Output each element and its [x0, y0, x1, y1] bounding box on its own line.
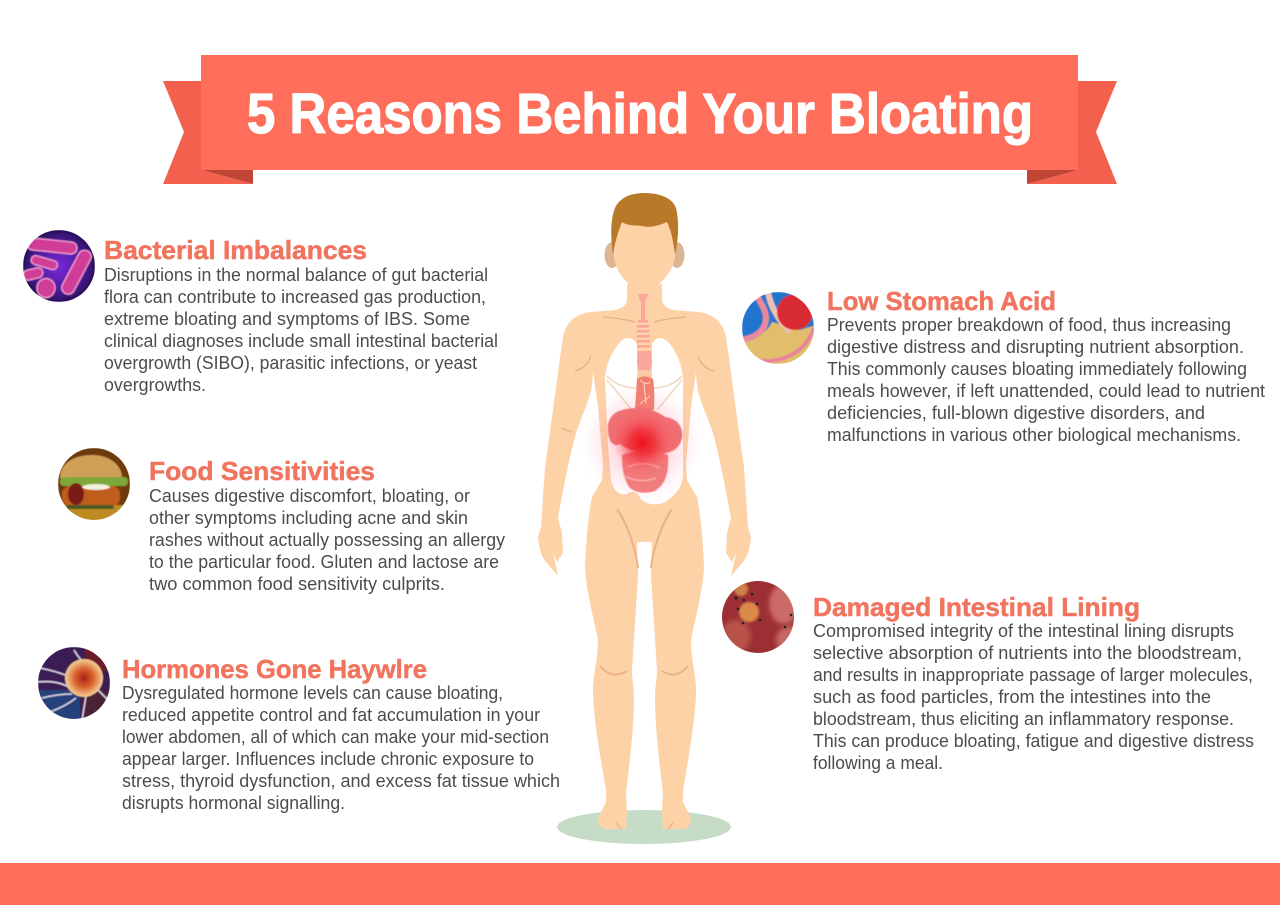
text block: overgrowths.: [104, 375, 206, 395]
hair: [611, 193, 678, 254]
text block: Compromised integrity of the intestinal lining disrupts: [813, 621, 1234, 641]
text block: appear larger. Influences include chronic exposure to: [122, 749, 534, 769]
lungs and abdominal cavity: [605, 338, 683, 504]
text block: deficiencies, full-blown digestive disorders, and: [827, 403, 1205, 423]
heading: Bacterial Imbalances: [104, 235, 367, 265]
icon: stomach lining: [740, 292, 816, 364]
text block: clinical diagnoses include small intestinal bacterial: [104, 331, 498, 351]
body fold lines: [561, 317, 714, 829]
text block: Prevents proper breakdown of food, thus increasing: [827, 315, 1231, 335]
banner band: [201, 55, 1078, 170]
trachea and bronchi: [637, 294, 652, 372]
head: [614, 222, 675, 289]
icon: burger: [58, 448, 130, 521]
text block: overgrowth (SIBO), parasitic infections, or yeast: [104, 353, 477, 373]
text block: digestive distress and disrupting nutrient absorption.: [827, 337, 1244, 357]
text block: [827, 315, 1265, 445]
text block: following a meal.: [813, 753, 943, 773]
heart and esophagus: [635, 370, 654, 410]
text block: meals however, if left unattended, could lead to nutrient: [827, 381, 1265, 401]
text block: [149, 486, 505, 594]
text block: Causes digestive discomfort, bloating, or: [149, 486, 470, 506]
left ribbon tail: [163, 81, 253, 184]
title: 5 Reasons Behind Your Bloating: [247, 82, 1033, 146]
liver and stomach: [608, 408, 682, 454]
text block: stress, thyroid dysfunction, and excess fat tissue which: [122, 771, 560, 791]
text block: selective absorption of nutrients into the bloodstream,: [813, 643, 1242, 663]
text block: rashes without actually possessing an allergy: [149, 530, 505, 550]
text block: [122, 683, 560, 813]
human body figure: [538, 193, 751, 844]
icon: bacteria: [22, 230, 95, 302]
body silhouette: [538, 280, 751, 829]
title banner: [163, 55, 1117, 184]
panel: low stomach acid: [740, 286, 1265, 445]
ears: [604, 242, 684, 268]
heading: Food Sensitivities: [149, 456, 375, 486]
text block: to the particular food. Gluten and lactose are: [149, 552, 499, 572]
text block: other symptoms including acne and skin: [149, 508, 468, 528]
intestines: [622, 451, 668, 493]
icon: intestinal lining: [722, 581, 794, 653]
heading: Low Stomach Acid: [827, 286, 1056, 316]
text block: This can produce bloating, fatigue and digestive distress: [813, 731, 1254, 751]
text block: two common food sensitivity culprits.: [149, 574, 445, 594]
panel: bacterial imbalances: [22, 230, 498, 395]
text block: extreme bloating and symptoms of IBS. Some: [104, 309, 470, 329]
text block: bloodstream, thus eliciting an inflammatory response.: [813, 709, 1234, 729]
text block: such as food particles, from the intestines into the: [813, 687, 1211, 707]
icon: neuron: [38, 647, 112, 720]
bloating glow: [580, 381, 704, 505]
footer bar: [0, 863, 1280, 905]
panel: food sensitivities: [58, 448, 505, 594]
text block: reduced appetite control and fat accumulation in your: [122, 705, 540, 725]
right ribbon tail: [1027, 81, 1117, 184]
text block: lower abdomen, all of which can make your mid-section: [122, 727, 549, 747]
ground shadow: [557, 810, 731, 844]
text block: Dysregulated hormone levels can cause bloating,: [122, 683, 503, 703]
text block: [813, 621, 1254, 773]
heading: Damaged Intestinal Lining: [813, 592, 1140, 622]
text block: malfunctions in various other biological mechanisms.: [827, 425, 1241, 445]
text block: and results in inappropriate passage of larger molecules,: [813, 665, 1253, 685]
text block: Disruptions in the normal balance of gut bacterial: [104, 265, 488, 285]
ribs: [607, 376, 682, 410]
panel: hormones gone haywire: [38, 647, 560, 813]
heading: Hormones Gone Haywlre: [122, 654, 427, 684]
text block: disrupts hormonal signalling.: [122, 793, 345, 813]
text block: [104, 265, 498, 395]
panel: damaged intestinal lining: [721, 581, 1254, 773]
text block: flora can contribute to increased gas production,: [104, 287, 486, 307]
text block: This commonly causes bloating immediately following: [827, 359, 1247, 379]
